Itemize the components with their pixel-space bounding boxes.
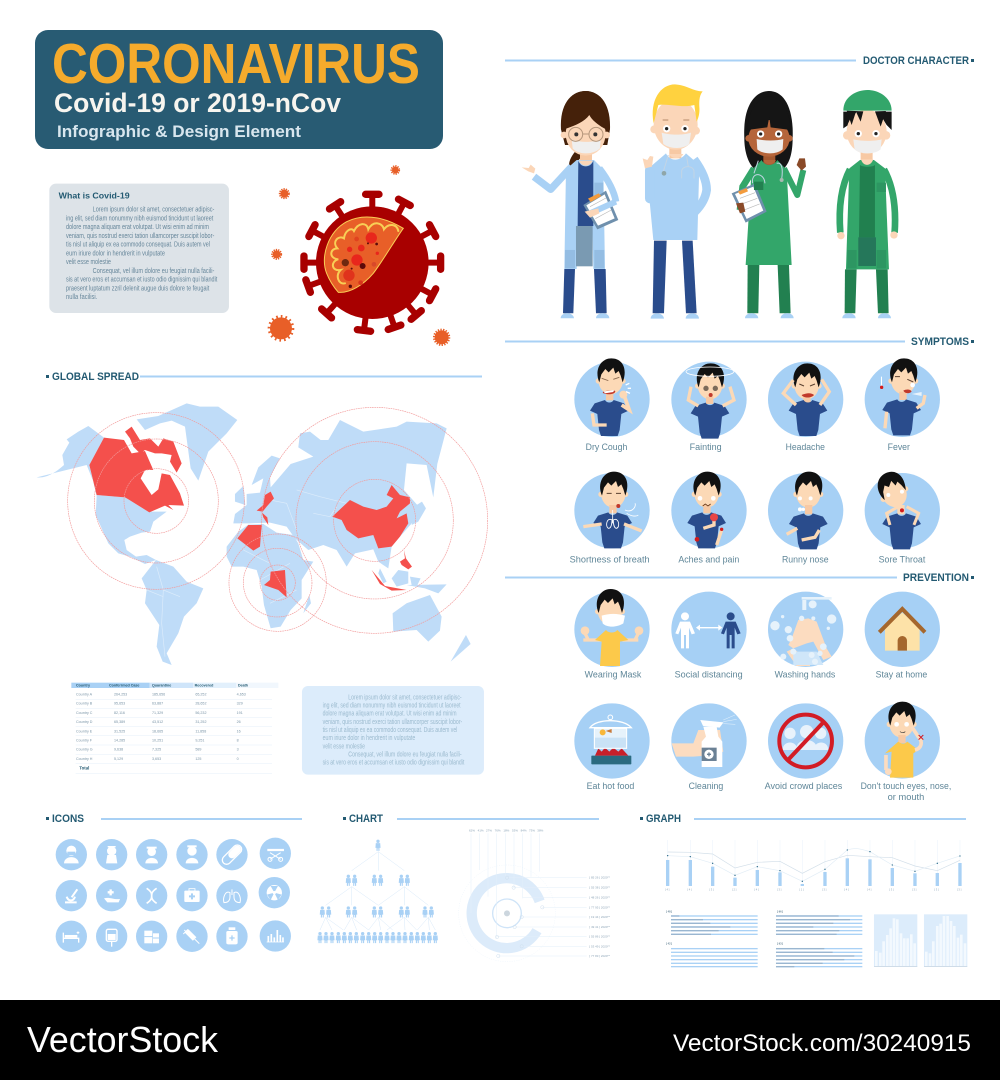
axis labels: [ 4 ] <box>844 888 849 892</box>
radial labels: [ 77 83 ] 2020** <box>589 954 611 958</box>
virus illustration <box>269 166 449 345</box>
table header: Conferrmed Case <box>109 684 139 688</box>
axis labels: [ 1 ] <box>799 888 804 892</box>
heading: global spread: GLOBAL SPREAD <box>52 371 139 383</box>
subtitle: Covid-19 or 2019-nCov <box>54 88 341 118</box>
image id: VectorStock.com/30240915 <box>673 1030 971 1057</box>
heading: icons <box>46 813 302 825</box>
table rows: 18,665 <box>152 729 163 733</box>
prevention grid <box>574 589 951 802</box>
table header: Recovered <box>195 684 213 688</box>
table header: Death <box>238 684 248 688</box>
radial labels: [ 48 26 ] 2020** <box>589 895 611 899</box>
radial labels: 18% <box>503 829 510 833</box>
radial labels <box>469 829 611 958</box>
table rows <box>76 692 272 773</box>
panel body text: sis at vero eros et accumsan et iusto odio dignissim qui blandit <box>66 277 217 284</box>
label: Stay at home <box>876 669 927 679</box>
spread rings <box>68 407 488 633</box>
table rows: 0 <box>237 757 239 761</box>
data table <box>71 683 278 773</box>
note text: Consequat, vel illum dolore eu feugiat nulla facili- <box>348 751 462 758</box>
infected countries <box>89 427 412 597</box>
table rows: 4,653 <box>237 692 246 696</box>
heading: symptoms <box>505 336 974 348</box>
note text <box>323 695 464 767</box>
icon: syringe <box>176 921 208 952</box>
label: Fainting <box>690 442 722 452</box>
axis labels: [ 4 ] <box>687 888 692 892</box>
main virus <box>304 194 441 331</box>
heading: chart: CHART <box>349 813 383 825</box>
axis labels: [ 3 ] <box>957 888 962 892</box>
horizontal bar lists <box>666 910 862 967</box>
prevention: cleaning <box>671 703 747 791</box>
icon: nurse <box>96 839 127 870</box>
bar and line graph <box>665 840 962 892</box>
icon: first aid kit <box>176 880 208 911</box>
axis labels: [ 3 ] <box>889 888 894 892</box>
heading: graph <box>640 813 966 825</box>
table rows: Country G <box>76 748 93 752</box>
doctor: blond man <box>643 84 707 319</box>
radial labels: [ 49 41 ] 2020** <box>589 925 611 929</box>
axis labels: [ 3 ] <box>912 888 917 892</box>
table rows: 125 <box>195 757 201 761</box>
axis labels: [ 2 ] <box>732 888 737 892</box>
radial labels: 76% <box>495 829 501 833</box>
note text: tis nisl ut aliquip ex ea commodo consequat. Duis autem vel <box>323 727 458 734</box>
radial labels: 73% <box>529 829 535 833</box>
table rows: 10,251 <box>152 738 163 742</box>
label: Dry Cough <box>586 442 627 452</box>
panel body text: nulla facilisi. <box>66 294 97 301</box>
radial labels: 53% <box>512 829 518 833</box>
axis labels: [ 3 ] <box>822 888 827 892</box>
panel body text <box>66 207 217 301</box>
symptom: runny nose <box>768 472 843 564</box>
label: or mouth <box>888 792 924 802</box>
world map <box>37 403 488 665</box>
doctor: woman in green <box>732 91 806 318</box>
symptom: shortness of breath <box>570 472 650 564</box>
table rows: Country H <box>76 757 93 761</box>
table header: Quarantine <box>152 684 171 688</box>
heading: icons: ICONS <box>52 813 84 825</box>
note text: dolore magna aliquam erat volutpat. Ut wisi enim ad minim <box>323 711 457 718</box>
axis labels <box>665 888 962 892</box>
note text: Lorem ipsum dolor sit amet, consectetuer adipisc- <box>348 695 462 702</box>
icon: capsule <box>216 839 248 870</box>
symptom: headache <box>768 362 843 452</box>
horizontal bar lists: [ 48 ] <box>666 910 672 914</box>
icon: DNA <box>136 880 167 911</box>
doctor characters <box>522 84 898 319</box>
radial labels: [ 77 95 ] 2020** <box>589 905 611 909</box>
radial labels: 27% <box>486 829 492 833</box>
axis labels: [ 3 ] <box>777 888 782 892</box>
panel body text: eum iriure dolor in hendrerit in vulputate <box>66 251 165 258</box>
tree people <box>317 840 438 943</box>
icon: hospital bed <box>56 921 87 952</box>
doctor: surgeon in green <box>837 90 898 318</box>
heading: global spread <box>46 371 482 383</box>
icon: surgeon <box>176 839 208 870</box>
small viruses <box>269 166 449 345</box>
table rows: 43,512 <box>152 720 163 724</box>
prevention: social distancing <box>671 592 747 679</box>
footer watermark <box>0 1000 1000 1080</box>
table rows: Country B <box>76 702 93 706</box>
prevention: eat hot food <box>574 703 650 791</box>
label: Sore Throat <box>879 554 926 564</box>
symptom: dry cough <box>574 358 650 452</box>
radial labels: 84% <box>521 829 527 833</box>
prevention: washing hands <box>768 592 843 679</box>
data points <box>667 849 961 882</box>
table rows: 63,887 <box>152 702 163 706</box>
icon: caring hand <box>96 880 127 911</box>
table rows: 185,656 <box>152 692 165 696</box>
icon: medicine boxes <box>136 921 167 952</box>
table rows: Country C <box>76 711 93 715</box>
symptoms grid <box>570 358 940 564</box>
horizontal bar lists: [ 93 ] <box>777 941 783 945</box>
country borders <box>147 490 347 657</box>
radial labels: 41% <box>478 829 484 833</box>
title banner <box>35 30 443 149</box>
label: Don't touch eyes, nose, <box>861 781 951 791</box>
table rows: 3,653 <box>152 757 161 761</box>
tagline: Infographic & Design Element <box>57 122 301 141</box>
panel body text: tis nisl ut aliquip ex ea commodo consequat. Duis autem vel <box>66 242 210 249</box>
label: Runny nose <box>782 554 829 564</box>
heading: prevention <box>505 572 974 584</box>
icon: lungs <box>216 880 248 911</box>
label: Aches and pain <box>678 554 739 564</box>
tree connectors <box>320 852 435 930</box>
icon grid <box>56 838 291 952</box>
note text: sis at vero eros et accumsan et iusto odio dignissim qui blandit <box>323 760 464 767</box>
heading: symptoms: SYMPTOMS <box>911 336 969 348</box>
trend lines <box>668 849 960 881</box>
table rows: 28,652 <box>195 702 207 706</box>
table rows: 3 <box>237 748 239 752</box>
panel heading: What is Covid-19 <box>59 191 130 201</box>
panel body text: velit esse molestie <box>66 259 111 266</box>
table rows: 191 <box>237 711 243 715</box>
table rows: Country F <box>76 738 93 742</box>
note text: veniam, quis nostrud exerci tation ullamcorper suscipit lobor- <box>323 719 463 726</box>
panel: map note <box>302 686 484 775</box>
label <box>861 781 951 802</box>
radial labels: [ 55 86 ] 2020** <box>589 935 611 939</box>
table rows: 9,251 <box>195 738 204 742</box>
table rows: 14,285 <box>114 738 125 742</box>
table rows: 8 <box>237 738 239 742</box>
icon: doctor mask <box>56 839 87 870</box>
note text: eum iriure dolor in hendrerit in vulputate <box>323 735 415 742</box>
label: Fever <box>888 442 910 452</box>
table rows: 7,325 <box>152 748 161 752</box>
radial labels: [ 19 44 ] 2020** <box>589 915 611 919</box>
table rows: 11,858 <box>195 729 206 733</box>
doctor: woman in lab coat <box>522 91 618 318</box>
radial labels: [ 55 38 ] 2020** <box>589 886 611 890</box>
horizontal bar lists: [ 96 ] <box>777 910 783 914</box>
table rows: 16 <box>237 729 241 733</box>
icon: doctor cap <box>136 839 167 870</box>
axis labels: [ 3 ] <box>934 888 939 892</box>
panel body text: praesent luptatum zzril delenit augue duis dolore te feugait <box>66 285 209 292</box>
radial labels: 38% <box>537 829 544 833</box>
table rows: 9,638 <box>114 748 123 752</box>
radial labels: [ 53 49 ] 2020** <box>589 944 611 948</box>
table rows: Total <box>79 766 89 771</box>
main title: CORONAVIRUS <box>52 32 420 96</box>
heading: graph: GRAPH <box>646 813 681 825</box>
heading: chart <box>343 813 599 825</box>
axis labels: [ 3 ] <box>709 888 714 892</box>
radial chart <box>459 829 611 962</box>
panel body text: Lorem ipsum dolor sit amet, consectetuer adipisc- <box>93 207 215 214</box>
panel body text: dolore magna aliquam erat volutpat. Ut wisi enim ad minim <box>66 224 209 231</box>
table rows: 65,252 <box>195 692 207 696</box>
icon: radiation <box>259 877 290 908</box>
symptom: aches and pain <box>671 472 747 564</box>
horizontal bar lists: [ 42 ] <box>666 941 672 945</box>
icon: statistics <box>260 920 291 952</box>
table rows: 31,252 <box>195 720 207 724</box>
radial labels: 62% <box>469 829 475 833</box>
label: Shortness of breath <box>570 554 650 564</box>
heading: prevention: PREVENTION <box>903 572 969 584</box>
continents <box>37 403 471 665</box>
bars <box>666 858 962 886</box>
panel body text: ing elit, sed diam nonummy nibh euismod tincidunt ut laoreet <box>66 215 213 222</box>
column chart panels <box>874 914 967 967</box>
table rows: 56,232 <box>195 711 207 715</box>
table rows: 82,116 <box>114 711 125 715</box>
table rows: 65,389 <box>114 720 125 724</box>
heading: doctor character <box>505 55 974 67</box>
table rows: 95,653 <box>114 702 125 706</box>
label: Wearing Mask <box>585 669 642 679</box>
prevention: stay at home <box>865 592 940 679</box>
table rows: 26 <box>237 720 241 724</box>
icon: stretcher <box>260 838 291 869</box>
symptom: fever <box>865 358 940 452</box>
label: Washing hands <box>775 669 836 679</box>
icon: medicine bottle <box>216 921 248 952</box>
axis labels: [ 4 ] <box>867 888 872 892</box>
prevention: wearing mask <box>574 589 650 679</box>
radial labels: [ 85 26 ] 2020** <box>589 876 611 880</box>
label: Headache <box>786 442 825 452</box>
note text: ing elit, sed diam nonummy nibh euismod tincidunt ut laoreet <box>323 703 461 710</box>
table rows: 71,329 <box>152 711 163 715</box>
logo text: VectorStock <box>27 1019 219 1060</box>
table rows: Country E <box>76 729 93 733</box>
note text: velit esse molestie <box>323 743 365 750</box>
table rows: 5,129 <box>114 757 123 761</box>
panel body text: Consequat, vel illum dolore eu feugiat nulla facili- <box>93 268 215 275</box>
label: Social distancing <box>675 669 743 679</box>
heading: doctor character: DOCTOR CHARACTER <box>863 55 969 67</box>
table rows: 589 <box>195 748 201 752</box>
table rows: 31,525 <box>114 729 125 733</box>
table rows: Country D <box>76 720 93 724</box>
table header: Country <box>76 684 91 688</box>
axis labels: [ 4 ] <box>665 888 670 892</box>
label: Eat hot food <box>587 781 634 791</box>
symptom: fainting <box>671 362 747 452</box>
axis labels: [ 4 ] <box>754 888 759 892</box>
panel body text: veniam, quis nostrud exerci tation ullamcorper suscipit lobor- <box>66 233 215 240</box>
panel: what is Covid-19 <box>49 184 229 313</box>
table rows: 329 <box>237 702 243 706</box>
table rows: 264,253 <box>114 692 127 696</box>
label: Avoid crowd places <box>765 781 843 791</box>
label: Cleaning <box>689 781 723 791</box>
icon: microscope <box>56 880 87 911</box>
prevention: avoid crowd places <box>765 703 843 791</box>
table header <box>71 683 278 688</box>
icon: IV bag <box>96 921 127 952</box>
table rows: Country A <box>76 692 93 696</box>
symptom: sore throat <box>865 467 940 564</box>
prevention: don't touch face <box>861 702 951 802</box>
tree chart <box>317 840 438 943</box>
